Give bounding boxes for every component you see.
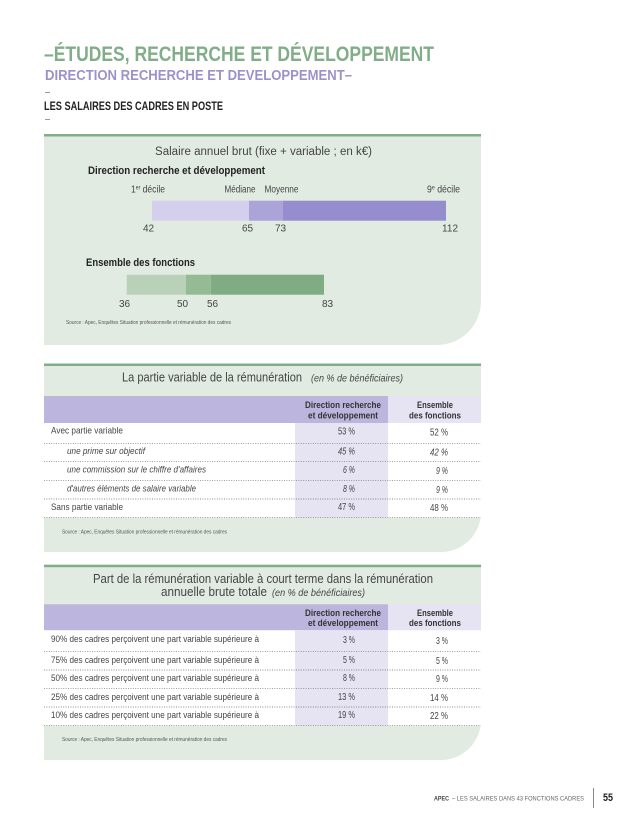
values: research and development: 19 % xyxy=(338,710,355,721)
page number: 55 xyxy=(603,792,613,804)
values: research and development: 8 % xyxy=(343,673,355,684)
bar values: all functions: 83 xyxy=(322,299,333,310)
bar values: all functions: 36 xyxy=(119,299,130,310)
row labels: 90% des cadres perçoivent une part variable supérieure à xyxy=(51,634,260,645)
source note: Source : Apec, Enquêtes Situation professionnelle et rémunération des cadres xyxy=(62,737,227,743)
column labels xyxy=(131,184,460,196)
footer: – LES SALAIRES DANS 43 FONCTIONS CADRES xyxy=(452,796,585,802)
row labels: Avec partie variable xyxy=(51,426,123,437)
table body xyxy=(44,630,481,726)
table header: des fonctions xyxy=(409,618,461,629)
values: all functions: 9 % xyxy=(436,674,448,685)
table header: Ensemble xyxy=(417,608,453,619)
column labels: 9 xyxy=(427,184,433,196)
panel: variable pay xyxy=(44,364,481,552)
footer xyxy=(434,788,613,808)
values: all functions: 9 % xyxy=(436,485,448,496)
values: all functions: 48 % xyxy=(430,503,448,514)
bar values: research and development: 42 xyxy=(143,224,154,234)
table header xyxy=(44,604,481,630)
values: research and development: 6 % xyxy=(343,465,355,476)
panel heading: annual salary: Salaire annuel brut (fixe + variable ; en k€) xyxy=(155,146,372,158)
row labels: 50% des cadres perçoivent une part variable supérieure à xyxy=(51,673,260,684)
table header: Direction recherche xyxy=(305,400,381,411)
values: research and development xyxy=(338,635,355,721)
bar values: all functions: 50 xyxy=(177,299,188,310)
values: research and development: 45 % xyxy=(338,446,355,458)
column labels: décile xyxy=(140,184,165,196)
row labels: Sans partie variable xyxy=(51,502,123,513)
panel: short-term variable share xyxy=(44,565,481,760)
row labels xyxy=(51,634,260,721)
values: research and development xyxy=(338,426,355,513)
subtitle: DIRECTION RECHERCHE ET DEVELOPPEMENT– xyxy=(45,68,352,84)
table header: des fonctions xyxy=(409,410,461,422)
table header: Ensemble xyxy=(417,400,453,411)
values: all functions: 5 % xyxy=(436,656,448,667)
panel heading: variable pay: (en % de bénéficiaires) xyxy=(311,374,403,384)
values: research and development: 5 % xyxy=(343,655,355,666)
panel heading: variable pay: La partie variable de la rémunération xyxy=(122,370,302,384)
values: all functions xyxy=(430,636,448,722)
bar values: research and development xyxy=(143,224,458,234)
panel heading: short-term variable share xyxy=(93,572,433,599)
row labels: d'autres éléments de salaire variable xyxy=(67,484,196,495)
values: research and development: 13 % xyxy=(338,692,355,703)
column labels: er xyxy=(136,186,140,192)
table header: et développement xyxy=(308,618,379,629)
panel heading: short-term variable share: annuelle brute totale xyxy=(161,585,267,599)
panel heading: short-term variable share: Part de la rémunération variable à court terme dans la rémunération xyxy=(93,572,433,586)
footer: APEC xyxy=(434,796,449,802)
bar chart: all functions xyxy=(127,275,324,295)
section heading: LES SALAIRES DES CADRES EN POSTE xyxy=(44,99,223,113)
column labels: décile xyxy=(435,184,460,196)
values: research and development: 47 % xyxy=(338,502,355,513)
bar values: research and development: 112 xyxy=(442,224,458,234)
values: all functions: 9 % xyxy=(436,466,448,477)
values: research and development: 3 % xyxy=(343,635,355,646)
row labels: 10% des cadres perçoivent une part variable supérieure à xyxy=(51,710,260,721)
title: –ÉTUDES, RECHERCHE ET DÉVELOPPEMENT xyxy=(44,43,434,66)
values: research and development: 8 % xyxy=(343,484,355,495)
row labels: une prime sur objectif xyxy=(67,446,146,457)
source note: Source : Apec, Enquêtes Situation professionnelle et rémunération des cadres xyxy=(62,530,227,536)
row labels xyxy=(51,426,206,513)
values: all functions: 3 % xyxy=(436,636,448,647)
chart heading: all functions: Ensemble des fonctions xyxy=(86,257,195,269)
bar values: all functions: 56 xyxy=(207,299,218,310)
bar values: research and development: 73 xyxy=(275,224,286,234)
column labels: 1 xyxy=(131,184,137,196)
bar values: all functions xyxy=(119,299,333,310)
table header xyxy=(44,396,481,423)
panel: annual gross salary xyxy=(44,134,481,345)
values: all functions xyxy=(430,428,448,514)
row labels: une commission sur le chiffre d'affaires xyxy=(67,465,206,476)
values: all functions: 42 % xyxy=(430,448,448,458)
bar chart: research and development xyxy=(152,201,446,221)
source note: Source : Apec, Enquêtes Situation professionnelle et rémunération des cadres xyxy=(66,320,231,326)
values: all functions: 52 % xyxy=(430,428,448,438)
chart heading: research and development: Direction recherche et développement xyxy=(88,165,265,177)
column labels: Moyenne xyxy=(264,184,299,196)
table header: et développement xyxy=(308,410,379,422)
values: research and development: 53 % xyxy=(338,426,355,437)
values: all functions: 14 % xyxy=(430,693,448,704)
column labels: e xyxy=(432,186,435,192)
row labels: 75% des cadres perçoivent une part variable supérieure à xyxy=(51,655,260,666)
column labels: Médiane xyxy=(224,184,256,196)
table header: Direction recherche xyxy=(305,608,381,619)
row labels: 25% des cadres perçoivent une part variable supérieure à xyxy=(51,692,260,703)
values: all functions: 22 % xyxy=(430,711,448,722)
bar values: research and development: 65 xyxy=(242,224,253,234)
table body xyxy=(44,423,481,518)
panel heading: short-term variable share: (en % de bénéficiaires) xyxy=(272,588,365,599)
